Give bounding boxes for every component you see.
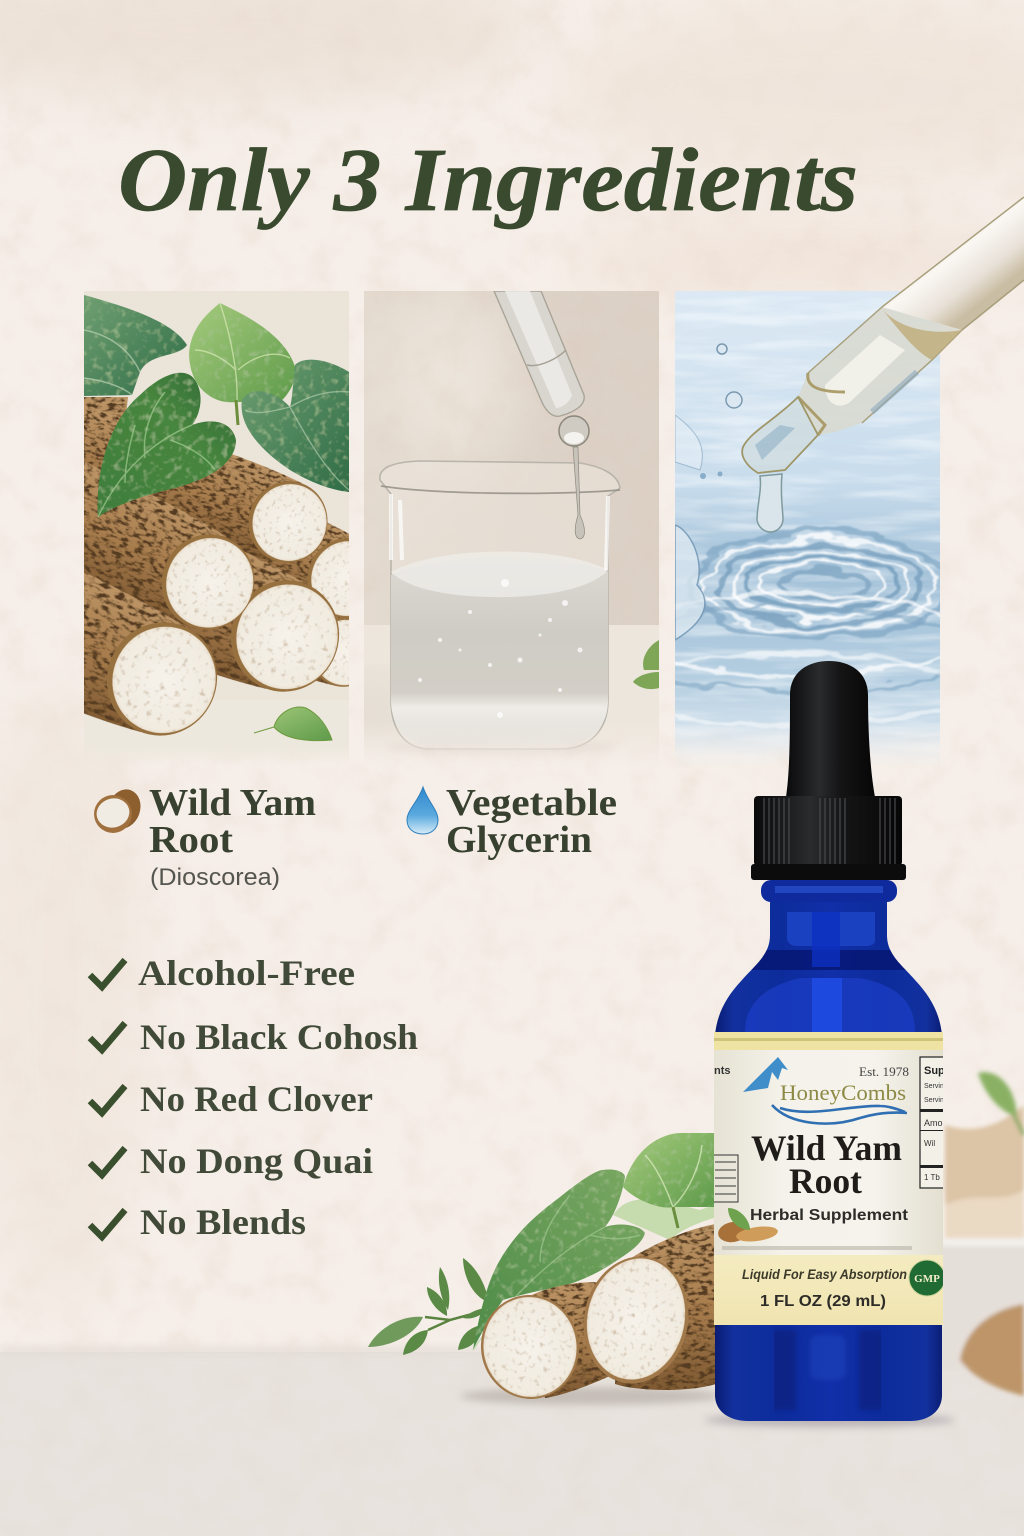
supplement facts box: Supp [924,1065,952,1077]
supplement facts box: Servings [924,1097,952,1104]
leaf: small on table [254,707,332,741]
item: no black cohosh: No Black Cohosh [140,1017,418,1057]
product bottle [705,661,955,1427]
GMP badge [909,1260,945,1296]
sprig [368,1258,488,1355]
GMP badge: GMP [914,1273,940,1285]
item: no dong quai: No Dong Quai [140,1141,373,1181]
icon: cut yam [93,785,146,833]
supplement facts box: Wil [924,1139,935,1148]
label nut and leaf [716,1208,779,1244]
bottle label [713,1032,952,1325]
title: Only 3 Ingredients [118,131,858,230]
label: wild yam root: (Dioscorea) [150,864,280,891]
small leaf at right [633,640,659,689]
herbs and cut roots by the bottle [368,1133,720,1405]
bottle label: Herbal Supplement [750,1207,909,1224]
glass body [710,880,950,1425]
supplement facts box [920,1057,952,1188]
item: alcohol-free: Alcohol-Free [138,953,355,993]
label: vegetable glycerin [446,782,617,861]
panel: glycerin beaker photo [350,290,659,775]
item: no blends: No Blends [140,1202,306,1242]
roots pile [84,397,349,736]
label: vegetable glycerin: Glycerin [446,819,592,861]
splash and droplets [675,344,742,640]
front cut root [572,1224,716,1393]
label: vegetable glycerin: Vegetable [446,782,617,824]
large pipette with drop [742,197,1024,532]
label: wild yam root: Root [149,819,233,861]
supplement facts box: Amou [924,1118,948,1128]
beaker [380,461,620,756]
leaves [473,1133,714,1350]
ripples [675,524,940,729]
bottle label: Wild Yam [751,1128,902,1168]
bottle label: 1 FL OZ (29 mL) [760,1293,886,1310]
label: wild yam root [149,782,316,891]
leaf: light green [189,303,296,425]
icon: water drop [407,787,438,834]
supplement facts box: Serving [924,1083,948,1090]
bottle label: Root [789,1161,862,1201]
panel: wild yam root photo [84,291,349,753]
table surface [0,1346,1024,1536]
pipette [494,291,589,539]
supplement facts box: 1 Tb [924,1173,940,1182]
leaf: right dark [242,360,349,492]
leaf: top left [84,295,187,396]
bottle label: HoneyCombs [780,1080,906,1105]
rear cut root [474,1282,612,1405]
checklist [90,953,418,1242]
label: wild yam root: Wild Yam [149,782,316,824]
ribbed cap [751,796,906,880]
panel: water photo [675,291,940,753]
blurred bowl of powder at right [940,1072,1024,1396]
left side label text: nts [714,1065,730,1077]
bottle label: Liquid For Easy Absorption [742,1266,907,1282]
logo mountain and waves [743,1057,907,1124]
dropper bulb [786,661,875,797]
leaf: big front [98,373,236,517]
left side label text [713,1065,738,1202]
item: no red clover: No Red Clover [140,1079,373,1119]
bottle label: Est. 1978 [859,1064,909,1079]
